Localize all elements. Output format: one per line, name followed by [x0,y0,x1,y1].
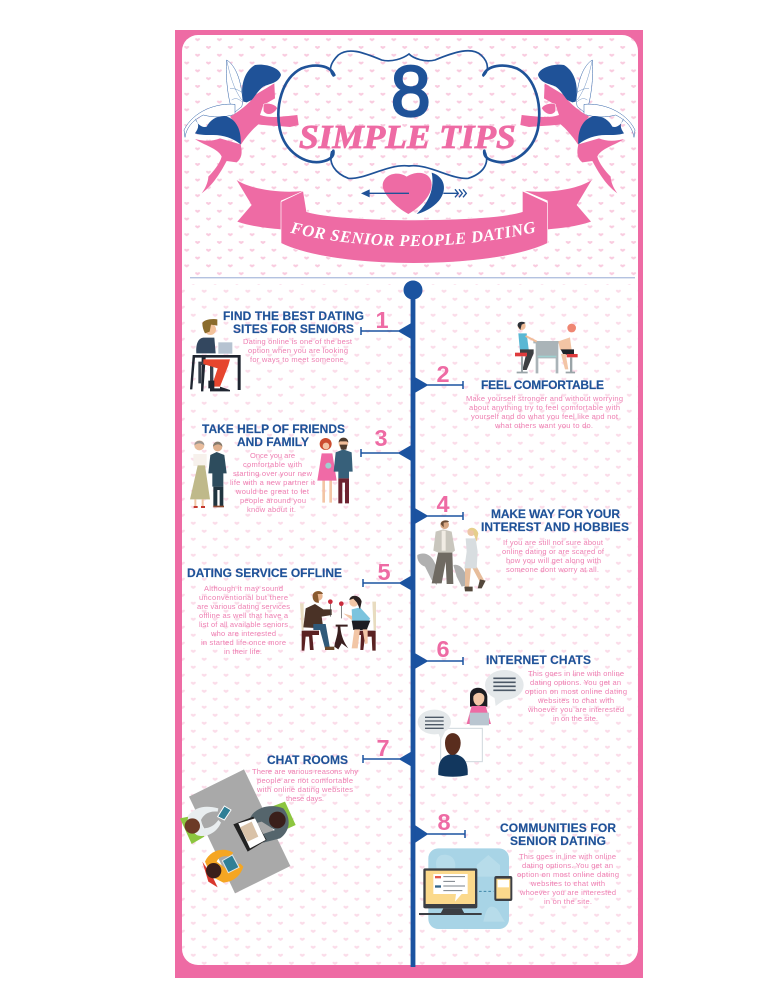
woman with laptop [467,688,491,725]
tip 8 [415,809,619,929]
body 5: in started life once more [201,638,286,647]
body 7 [252,767,358,803]
number 8: 8 [437,809,451,835]
tip 4 [415,491,629,591]
connector 7 [363,752,412,766]
body 3: life with a new partner it [230,478,316,487]
body 5: in their life. [224,647,262,656]
heading 4: MAKE WAY FOR YOUR [491,507,620,521]
title: simple tips: SIMPLE TIPS [299,119,516,156]
patterned inner panel [182,35,638,965]
tip 3 [190,422,411,514]
heading 8 [500,821,616,848]
body 3: comfortable with [243,460,302,469]
tip 6 [415,636,627,777]
connector 4 [415,509,463,523]
body 6: websites to chat with [537,696,614,705]
tip 2 [415,322,623,430]
number 1: 1 [375,307,389,333]
heading 6: INTERNET CHATS [486,653,591,667]
cupid right [520,60,635,193]
body 6: dating options. You get an [530,678,621,687]
body 6: whoever you are interested [527,705,624,714]
body 8: whoever you are interested [519,888,616,897]
heading 1: FIND THE BEST DATING [223,309,364,323]
body 5: Although it may sound [204,584,283,593]
number 2: 2 [436,361,450,387]
illustration: monitor and tablet [419,848,512,929]
body 2 [466,394,623,430]
body 6: option on most online dating [525,687,627,696]
illustration: couple at table [515,322,578,373]
ribbon text: FOR SENIOR PEOPLE DATING [290,222,536,246]
heading 3: AND FAMILY [237,435,309,449]
body 1 [243,337,353,364]
body 5: offline as well that have a [199,611,289,620]
heart and arrow [361,173,466,214]
divider [190,277,635,278]
heading 8: SENIOR DATING [510,834,606,848]
ornamental frame [278,51,539,178]
number 7: 7 [376,735,390,761]
ribbon banner [236,180,592,263]
man from behind [438,733,468,777]
heading 5: DATING SERVICE OFFLINE [187,566,342,580]
heading 8: COMMUNITIES FOR [500,821,616,835]
body 8: This goes in line with online [519,852,616,861]
connector 6 [415,654,463,668]
cupid left [184,60,299,193]
body 3: Once you are [250,451,295,460]
body 2: what others want you to do. [494,421,593,430]
body 4: someone dont worry at all. [506,565,599,574]
heading 2: FEEL COMFORTABLE [481,378,604,392]
illustration: meeting table from above [180,769,296,893]
body 4: If you are still not sure about [503,538,604,547]
body 5 [197,584,290,656]
young couple [322,479,332,503]
body 6 [525,669,627,723]
number 5: 5 [377,559,391,585]
body 8: in on the site. [544,897,592,906]
body 6: in on the site. [553,714,598,723]
heading 1: SITES FOR SENIORS [233,322,354,336]
body 7: There are various reasons why [252,767,358,776]
body 1: for ways to meet someone. [250,355,346,364]
number 6: 6 [436,636,450,662]
body 3: starting over your new [233,469,313,478]
connector 5 [363,576,412,590]
body 7: with online dating websites [256,785,353,794]
body 5: list of all available seniors [199,620,288,629]
body 3 [230,451,316,514]
body 3: people around you [240,496,306,505]
heading 3 [202,422,345,449]
body 4: online dating or are scared of [502,547,605,556]
heading 4: INTEREST AND HOBBIES [481,520,629,534]
body 8 [517,852,619,906]
illustration: man at desk [190,319,241,391]
speech bubble top [485,670,524,706]
body 3: know about it. [247,505,296,514]
connector 8 [415,826,465,842]
body 8: option on most online dating [517,870,619,879]
heading 3: TAKE HELP OF FRIENDS [202,422,345,436]
illustration: dinner date [300,591,376,651]
heading 1 [223,309,364,336]
tip 7 [180,735,412,893]
connector 2 [415,378,463,392]
body 4: how you will get along with [506,556,601,565]
header [184,42,636,263]
body 3: would be great to let [235,487,310,496]
body 7: these days. [286,794,324,803]
connector 3 [361,446,411,460]
tip 1 [190,307,411,391]
body 8: websites to chat with [530,879,605,888]
body 1: Dating online is one of the best [243,337,353,346]
body 8: dating options. You get an [522,861,613,870]
speech bubble bottom [418,710,451,740]
number 8: 8 [391,52,431,132]
timeline spine [404,280,422,967]
illustration: senior couple [190,438,353,508]
body 5: are various dating services [197,602,290,611]
body 5: unconventional but there [199,593,288,602]
body 5: who are interested [210,629,276,638]
body 7: people are not comfortable [257,776,353,785]
number 3: 3 [374,425,388,451]
tip 5 [187,559,412,656]
heading 7: CHAT ROOMS [267,753,348,767]
connector 1 [361,324,411,338]
number 4: 4 [436,491,450,517]
illustration: walking couple [417,520,486,591]
body 2: yourself and do what you feel like and not [471,412,619,421]
body 2: Make yourself stronger and without worrying [466,394,623,403]
body 2: about anything try to feel comfortable with [469,403,620,412]
body 4 [502,538,605,574]
body 1: option when you are looking [248,346,348,355]
pink frame [175,30,643,978]
heading 4 [481,507,629,534]
body 6: This goes in line with online [528,669,624,678]
illustration: video chat [418,670,524,777]
